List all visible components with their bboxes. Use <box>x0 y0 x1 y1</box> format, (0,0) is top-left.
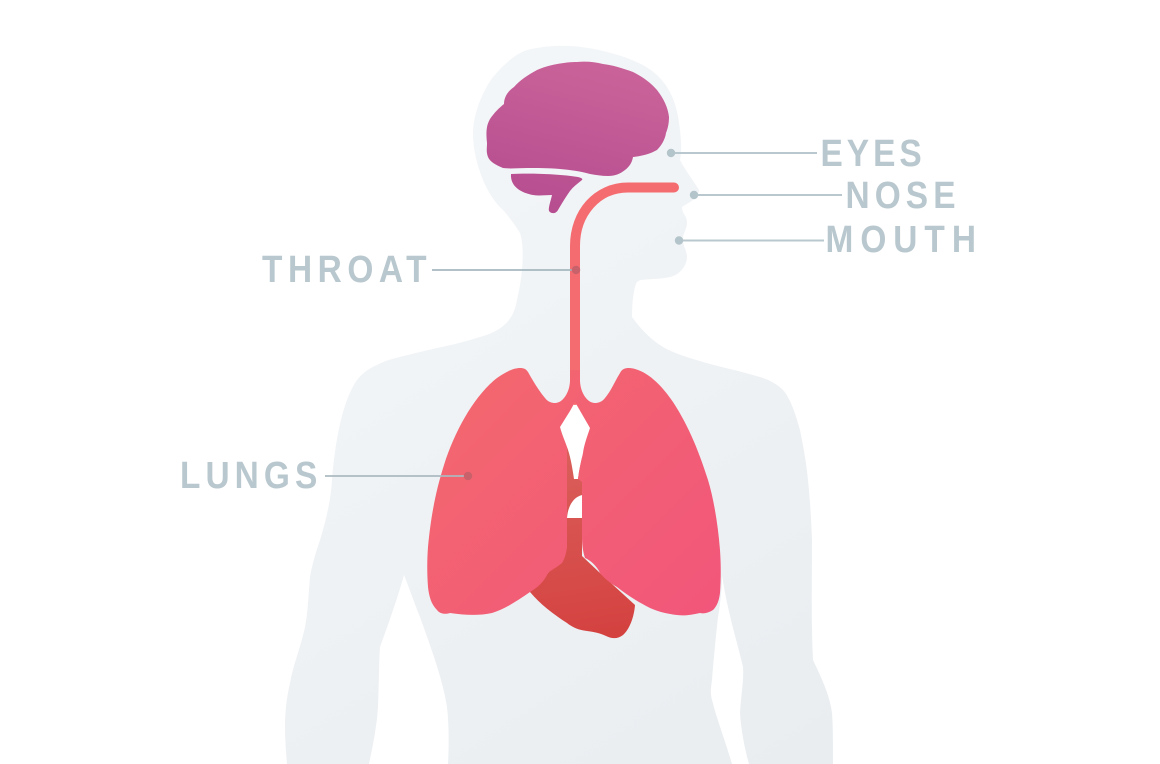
callout: eyes <box>667 132 922 174</box>
callout: lungs <box>180 454 472 496</box>
airway <box>575 188 674 400</box>
gap inside heart <box>567 495 582 518</box>
brain <box>486 62 669 213</box>
trachea junction <box>570 370 580 400</box>
callout: mouth <box>675 218 976 260</box>
callout: lungs: LUNGS <box>180 454 317 496</box>
callout: eyes: EYES <box>820 132 922 174</box>
right lung <box>570 368 721 615</box>
lungs <box>427 368 721 615</box>
cerebrum <box>486 62 669 176</box>
left lung <box>427 368 570 615</box>
callout: throat <box>262 248 580 290</box>
body silhouette <box>285 46 833 764</box>
gap above heart <box>560 402 590 479</box>
callout: throat: THROAT <box>262 248 427 290</box>
callout: nose <box>690 174 956 216</box>
cerebellum <box>511 174 582 213</box>
heart <box>530 445 635 638</box>
callout: mouth: MOUTH <box>826 218 976 260</box>
callout: nose: NOSE <box>846 174 955 216</box>
